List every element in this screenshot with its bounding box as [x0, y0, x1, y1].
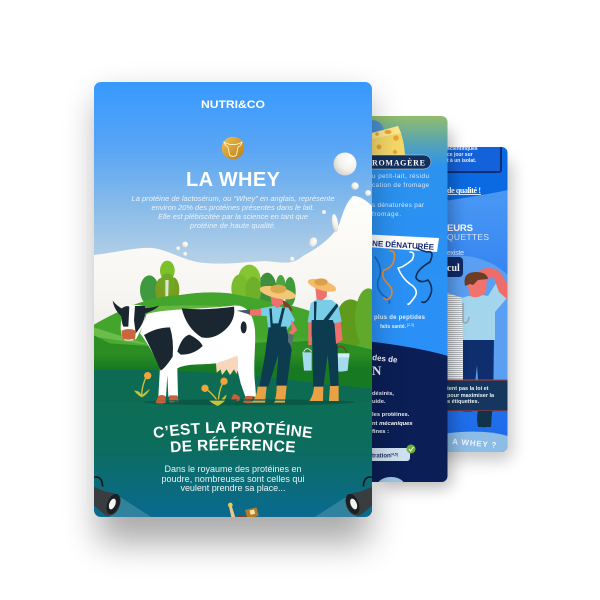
- title: la whey: LA WHEY: [186, 169, 281, 191]
- straps and bib: [268, 308, 287, 332]
- heading: reference protein: C’EST LA PROTÉINE: [154, 421, 312, 438]
- heading: labels: [448, 224, 489, 255]
- banner: denatured: [372, 234, 439, 252]
- buckets: [302, 352, 312, 371]
- lower teal background: [94, 402, 372, 517]
- intro text: u petit-lait, résidu: [372, 173, 429, 180]
- method heading: N: [372, 363, 382, 378]
- ground: [93, 370, 373, 413]
- logo: nutri&co: NUTRI&CO: [201, 99, 265, 111]
- far hill: [93, 292, 373, 373]
- intro text: La protéine de lactosérum, ou “Whey” en anglais, représente: [132, 194, 334, 203]
- face: [270, 295, 284, 308]
- face: [468, 279, 487, 298]
- ground shadow: [144, 399, 355, 405]
- next button: [378, 477, 404, 482]
- intro text: Elle est plébiscitée par la science en tant que: [158, 212, 308, 221]
- main card shadow: [98, 98, 370, 543]
- method text: les protéines.: [372, 412, 410, 418]
- icon: green check: [406, 444, 416, 454]
- method text: [372, 391, 413, 435]
- mid hill: [93, 335, 373, 393]
- light crop stripes: [93, 327, 150, 345]
- striped label board: [448, 293, 463, 380]
- hooves and boots overlap strip: [144, 397, 355, 406]
- card 2: whey cheese origin: [372, 116, 448, 482]
- body text: veulent prendre sa place...: [180, 483, 286, 493]
- straps and bib: [312, 302, 338, 337]
- method heading: [372, 354, 398, 375]
- scientific text box: t à un isolat.: [447, 158, 477, 164]
- light beams: [108, 497, 153, 518]
- scientific text box: scientifiques: [447, 146, 478, 152]
- boots: [250, 387, 267, 403]
- pill: calcul: cul: [447, 263, 460, 274]
- peptides text: faits santé.: [380, 324, 406, 330]
- intro text: environ 20% des protéines présentes dans le lait.: [152, 203, 314, 212]
- intro text: protéine de haute qualité.: [189, 221, 276, 230]
- heading: labels: existe: [447, 250, 464, 257]
- legs: [259, 329, 292, 387]
- method text: uide.: [372, 399, 386, 405]
- muzzle: [122, 329, 136, 341]
- heading pill: [372, 154, 432, 170]
- method text: fines :: [372, 429, 389, 435]
- milk droplets: [176, 152, 371, 261]
- woman farmer: [237, 283, 297, 403]
- information band: [448, 380, 508, 412]
- peptides text: [2,3]: [407, 323, 414, 327]
- boots: [309, 387, 323, 401]
- button: filtration: [372, 448, 410, 461]
- right trees: [335, 288, 382, 348]
- icon: figure holding a trophy: [228, 503, 259, 521]
- card 3: reading labels: [448, 147, 508, 452]
- intro text: fromage.: [372, 211, 401, 218]
- shoe below the band: [477, 411, 492, 427]
- head: [121, 305, 145, 339]
- arm: [249, 308, 263, 316]
- peptides text: plus de peptides: [374, 315, 426, 321]
- trousers: [463, 336, 494, 412]
- udder: [216, 356, 238, 375]
- icon: left spotlight: [93, 477, 123, 516]
- heading pill: ROMAGÈRE: [372, 158, 425, 168]
- protein squiggles: [375, 248, 432, 304]
- icon: right spotlight: [343, 477, 373, 516]
- card 2 shadow: [380, 130, 452, 488]
- milk wave: [94, 196, 372, 324]
- heading: labels: EURS: [447, 223, 473, 234]
- infographic stack of three cards: [77, 77, 520, 564]
- lighter arc behind man: [448, 256, 508, 380]
- hooves: [156, 395, 166, 404]
- raised arm: [477, 268, 508, 300]
- sky background: [94, 82, 372, 282]
- intro text: s dénaturées par: [372, 202, 424, 209]
- scientific text box: [448, 147, 502, 173]
- hand on board: [463, 303, 469, 323]
- body patches: [182, 307, 234, 338]
- hair: [282, 300, 293, 312]
- hair: [464, 272, 488, 286]
- icon: cheese: [372, 120, 405, 155]
- cow body: [140, 306, 256, 397]
- body text: [162, 464, 304, 493]
- body text: poudre, nombreuses sont celles qui: [162, 474, 304, 484]
- card 3 shadow: [420, 160, 512, 460]
- hat: [259, 283, 297, 302]
- shirt: [308, 299, 342, 323]
- legs: [312, 318, 339, 387]
- hat: [307, 276, 337, 294]
- back arm and glove: [289, 319, 297, 335]
- shirt: [462, 280, 507, 340]
- peptides text: [374, 314, 425, 328]
- shirt: [261, 306, 295, 330]
- bottom arc: [448, 432, 508, 452]
- information band: pour maximiser la: [447, 393, 495, 399]
- footer question: A WHEY ?: [452, 437, 498, 450]
- main card: la whey: [94, 82, 372, 517]
- method heading: des de: [372, 353, 398, 365]
- heading: reference protein: DE RÉFÉRENCE: [170, 436, 296, 452]
- heading: reference protein: [154, 421, 312, 452]
- button: filtration: [4,5]: [391, 452, 398, 456]
- intro text: cation de fromage: [372, 182, 429, 189]
- button: filtration: tration: [372, 454, 391, 460]
- pill: calcul: [448, 257, 463, 277]
- flowers: [134, 372, 228, 406]
- trees behind hills: [140, 261, 296, 307]
- method text: désirés,: [372, 391, 394, 397]
- ears: [113, 301, 123, 317]
- scientific text box: ce jour sur: [447, 152, 473, 158]
- man farmer: [302, 276, 349, 401]
- arms: [308, 322, 312, 345]
- intro text: [132, 194, 334, 230]
- quality line: de qualité !: [447, 186, 481, 195]
- face: [315, 285, 327, 301]
- cow: [113, 301, 256, 404]
- information band: s étiquettes.: [447, 399, 480, 405]
- intro text: [372, 173, 429, 218]
- information band: tent pas la loi et: [447, 386, 489, 392]
- banner: denatured: NE DÉNATURÉE: [372, 239, 435, 252]
- shoes: [478, 412, 492, 427]
- body text: Dans le royaume des protéines en: [164, 464, 302, 474]
- man reading a label: [448, 268, 508, 427]
- navy lower panel: [372, 342, 448, 482]
- dark blue header zone: [448, 147, 508, 200]
- heading: labels: QUETTES: [447, 232, 489, 242]
- farm illustration: [93, 261, 382, 413]
- method text: nt mécaniques: [372, 421, 413, 427]
- icon: gold cow medal: [222, 137, 244, 159]
